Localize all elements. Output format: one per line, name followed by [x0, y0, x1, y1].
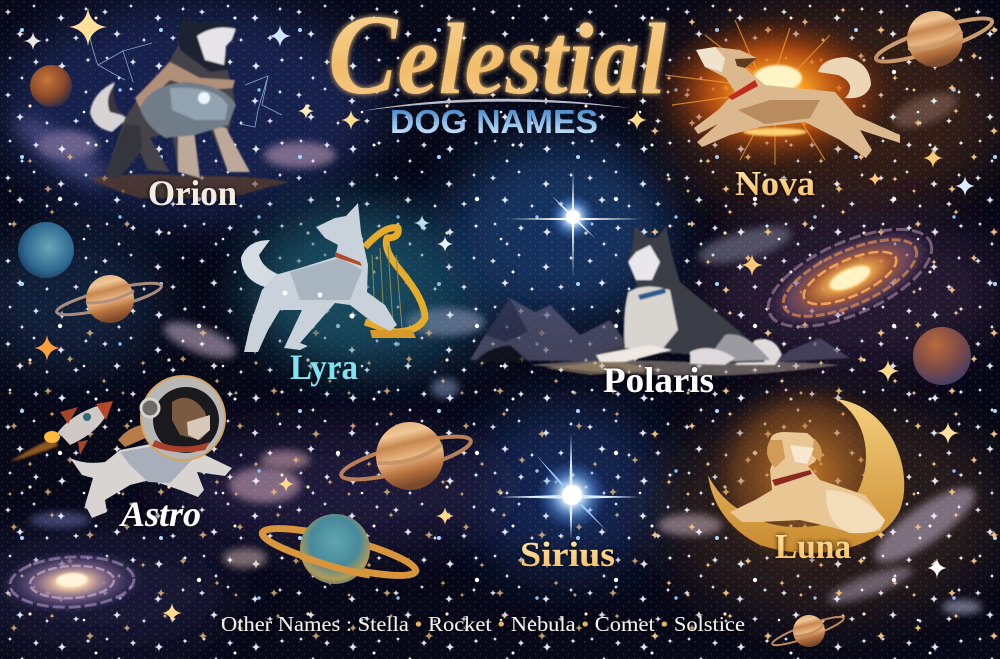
constellation lines: [88, 27, 282, 127]
planet: teal ringed: [259, 514, 419, 585]
label: Sirius: Sirius: [520, 535, 615, 574]
planet: blue earth: [18, 222, 74, 278]
planet: mars top left: [30, 65, 72, 107]
planet: saturn center: [338, 422, 474, 490]
label: Nova: Nova: [735, 164, 815, 203]
snowy mountains: [470, 298, 850, 376]
big star: Sirius: [500, 433, 640, 540]
dog: Polaris resting: [594, 226, 782, 365]
planet: saturn left: [54, 275, 164, 323]
galaxy: spiral bottom left: [0, 546, 146, 618]
label: Lyra: Lyra: [290, 347, 358, 387]
rocket: [10, 401, 113, 462]
dog: Nova with explosion: [653, 14, 900, 170]
subtitle: dog names: DOG NAMES: [390, 103, 598, 140]
title swoosh: [362, 99, 630, 111]
label: Orion: Orion: [148, 173, 237, 213]
planet: small saturn bottom: [770, 612, 846, 650]
dog: Luna on crescent moon: [707, 377, 904, 573]
nebula clouds: [7, 85, 984, 614]
planet: mauve right: [913, 327, 971, 385]
planet: saturn top right: [873, 11, 995, 69]
label: Luna: Luna: [775, 527, 851, 566]
galaxy: spiral right: [755, 209, 945, 347]
dog: Orion on rock ledge: [90, 15, 290, 198]
label: Astro: Astro: [119, 494, 201, 534]
other names line: Other Names : Stella • Rocket • Nebula • Comet • Solstice: [221, 612, 745, 636]
label: Polaris: Polaris: [603, 360, 714, 400]
dog: Lyra with golden harp: [241, 203, 435, 360]
dog: Astro in space suit: [70, 376, 232, 518]
big star: above Polaris: [505, 170, 641, 278]
